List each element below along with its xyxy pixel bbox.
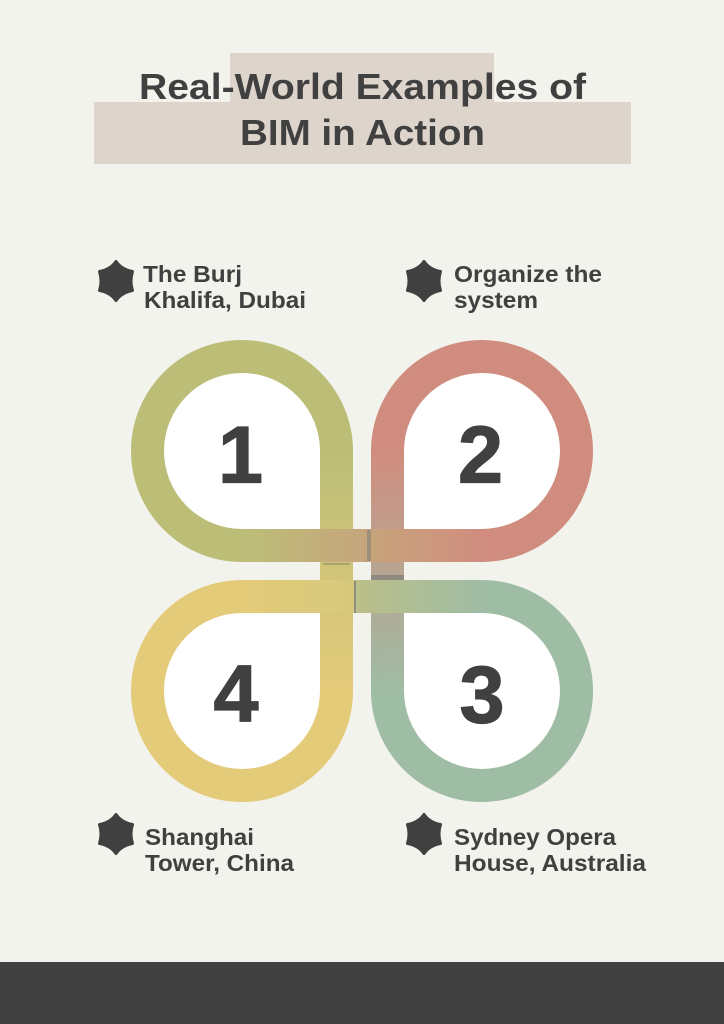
title: Real-World Examples of: [139, 66, 587, 107]
label: Shanghai Tower, China: Tower, China: [145, 850, 294, 876]
number 2: 2: [458, 410, 503, 500]
label: Shanghai Tower, China: [100, 814, 294, 876]
number 1: 1: [218, 410, 263, 500]
icon: star bullet 3: [408, 814, 440, 854]
label: Organize the system: system: [454, 287, 538, 313]
label: Organize the system: Organize the: [454, 261, 602, 287]
footer bar: [0, 962, 724, 1024]
label: The Burj Khalifa, Dubai: [100, 261, 306, 313]
label: Organize the system: [408, 261, 602, 313]
title: BIM in Action: [240, 112, 485, 153]
label: Sydney Opera House, Australia: Sydney Opera: [454, 824, 616, 850]
number 4: 4: [213, 650, 259, 740]
title: [139, 66, 587, 153]
label: The Burj Khalifa, Dubai: The Burj: [143, 261, 242, 287]
petal fills: [164, 373, 560, 769]
label: Sydney Opera House, Australia: [408, 814, 646, 876]
icon: star bullet 4: [100, 814, 132, 854]
title backing shapes: [94, 53, 631, 164]
icon: star bullet 2: [408, 262, 440, 300]
label: The Burj Khalifa, Dubai: Khalifa, Dubai: [144, 287, 306, 313]
crossing bands: [320, 451, 353, 691]
number 3: 3: [459, 650, 505, 740]
ring arcs: [148, 356, 576, 786]
label: Shanghai Tower, China: Shanghai: [145, 824, 254, 850]
label: Sydney Opera House, Australia: House, Australia: [454, 850, 646, 876]
icon: star bullet 1: [100, 262, 132, 300]
clover diagram: [148, 356, 576, 786]
